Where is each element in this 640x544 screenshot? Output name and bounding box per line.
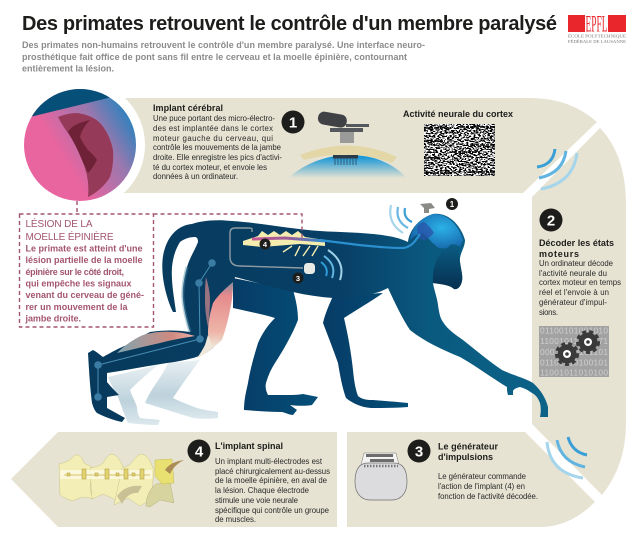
body text: contrôle les mouvements de la jambe <box>153 143 281 152</box>
icon: binary data and gears <box>539 326 609 378</box>
number 3: 3 <box>415 444 423 460</box>
body text: cortex moteur en temps <box>539 278 621 287</box>
body text: réel et l'envoie à un <box>539 288 609 297</box>
body text: moteur gauche du cerveau, qui <box>153 134 273 143</box>
body text <box>438 472 538 501</box>
number 3 marker <box>292 272 304 284</box>
body text: données à un ordinateur. <box>153 172 238 181</box>
spine with implant <box>243 231 325 256</box>
heading: Implant cérébral <box>153 103 223 113</box>
number 1 <box>282 110 304 134</box>
number 3 marker: 3 <box>296 274 300 283</box>
number 4 marker <box>260 238 270 250</box>
body text <box>539 259 621 317</box>
subtitle text <box>22 40 425 74</box>
body text: stimule une voie neurale <box>215 496 298 505</box>
brain close-up circle <box>24 89 145 201</box>
wireless waves bottom <box>547 437 587 478</box>
body text: des est implantée dans le cortex <box>153 124 273 133</box>
heading: d'impulsions <box>438 452 493 462</box>
callout text: venant du cerveau de géné- <box>26 290 144 300</box>
thigh edge highlight <box>183 267 190 332</box>
body text: l'action de l'implant (4) en <box>438 482 525 491</box>
icon: pulse generator device <box>355 453 407 500</box>
number 4: 4 <box>195 444 204 460</box>
heading <box>438 442 498 462</box>
far leg <box>233 278 318 415</box>
body text: fonction de l'activité décodée. <box>438 492 538 501</box>
dashed leader and box <box>20 201 302 327</box>
icon: binary data and gears: 01101010100101 <box>540 358 608 368</box>
icon: binary data and gears: 11001011010100 <box>540 368 608 378</box>
heading <box>539 238 614 259</box>
panel background <box>532 128 626 495</box>
icon: binary data and gears: 00010110101101 <box>540 347 608 357</box>
number 4 <box>188 440 210 462</box>
callout text: lésion partielle de la moelle <box>26 255 142 265</box>
panel: implant cerebral <box>110 98 597 193</box>
body text: droite. Elle enregistre les pics d'activi- <box>153 153 282 162</box>
neural bypass line <box>320 234 420 248</box>
far arm <box>323 293 408 408</box>
heading: moteurs <box>539 249 579 259</box>
dark blue skull wedge <box>32 89 110 117</box>
brain cortex <box>410 214 463 249</box>
callout: spinal lesion <box>20 201 302 327</box>
callout heading: MOELLE ÉPINIÈRE <box>26 230 114 243</box>
joints and bones of paralysed leg <box>94 259 216 401</box>
number 2 <box>540 208 562 232</box>
lesion core <box>68 120 97 173</box>
panel background <box>110 98 597 193</box>
EPFL logo: EPFL <box>586 12 608 36</box>
icon: binary data and gears: 01100101001010 <box>540 326 608 336</box>
wireless waves head <box>390 205 412 233</box>
chart: neural activity raster <box>424 124 495 176</box>
heading: L'implant spinal <box>215 441 283 451</box>
number 2: 2 <box>547 212 555 230</box>
callout heading <box>26 217 114 243</box>
body text: placé chirurgicalement au-dessus <box>215 467 330 476</box>
callout text: épinière sur le côté droit, <box>26 267 124 277</box>
body text <box>215 457 330 524</box>
head implant device <box>420 203 435 213</box>
subtitle text: Des primates non-humains retrouvent le contrôle d'un membre paralysé. Une interface neuro- <box>22 40 425 50</box>
subtitle text: prosthétique fait office de pont sans fil entre le cerveau et la moelle épinière, contournant <box>22 52 407 62</box>
callout heading: LÉSION DE LA <box>26 217 93 230</box>
panel: pulse generator <box>347 432 595 527</box>
body, near leg, tail, head and near arm <box>88 214 548 422</box>
panel background <box>11 432 337 527</box>
circle fill <box>24 89 136 201</box>
body text: té du cortex moteur, et envoie les <box>153 163 267 172</box>
number 1 marker <box>446 198 458 210</box>
icon: implant on cortex <box>288 111 407 178</box>
body text <box>153 114 282 181</box>
subtitle text: entièrement la lésion. <box>22 64 114 74</box>
body text: Le générateur commande <box>438 472 526 481</box>
callout text <box>24 244 144 324</box>
body text: de muscles. <box>215 515 256 524</box>
body text: spécifique qui contrôle un groupe <box>215 506 329 515</box>
panel background <box>347 432 595 527</box>
face shading <box>433 247 462 289</box>
EPFL logo: ÉCOLE POLYTECHNIQUE <box>568 34 626 38</box>
body text: Un ordinateur décode <box>539 259 613 268</box>
callout text: qui empêche les signaux <box>26 278 132 288</box>
number 1: 1 <box>289 114 297 132</box>
motor cortex area <box>417 222 434 240</box>
body text: la lésion. Chaque électrode <box>215 486 309 495</box>
white halo <box>15 80 145 210</box>
callout text: Le primate est atteint d'une <box>26 244 142 254</box>
body text: sions. <box>539 308 558 317</box>
wireless waves body <box>321 250 342 280</box>
monkey illustration <box>88 198 548 425</box>
callout text: jambe droite. <box>24 314 81 324</box>
panel: decoder <box>532 128 626 495</box>
heading: Décoder les états <box>539 238 614 248</box>
body text: Une puce portant des micro-électro- <box>153 114 275 123</box>
body text: l'activité neurale du <box>539 269 607 278</box>
number 1 marker: 1 <box>450 200 455 209</box>
EPFL logo: FÉDÉRALE DE LAUSANNE <box>568 39 626 44</box>
number 4 marker: 4 <box>263 240 268 249</box>
calf muscle <box>117 332 195 353</box>
panel: spinal implant <box>11 432 337 527</box>
title: Des primates retrouvent le contrôle d'un membre paralysé <box>22 13 557 35</box>
body text: Un implant multi-électrodes est <box>215 457 323 466</box>
generator in body <box>304 263 315 274</box>
body text: de la moelle épinière, en aval de <box>215 476 327 485</box>
icon: binary data and gears: 11001011010171 <box>540 336 608 346</box>
lesion area <box>58 113 113 197</box>
number 3 <box>408 440 430 462</box>
ghost legs: movement trace <box>108 360 218 425</box>
heading: Le générateur <box>438 442 498 452</box>
thigh muscles <box>197 277 233 358</box>
icon: vertebrae with electrodes <box>59 454 184 507</box>
EPFL logo <box>568 12 626 44</box>
callout text: rer un mouvement de la <box>26 302 128 312</box>
body text: générateur d'impul- <box>539 298 607 307</box>
heading: neural activity: Activité neurale du cortex <box>403 109 513 119</box>
wireless waves top <box>537 149 577 189</box>
implant wire <box>230 228 303 268</box>
